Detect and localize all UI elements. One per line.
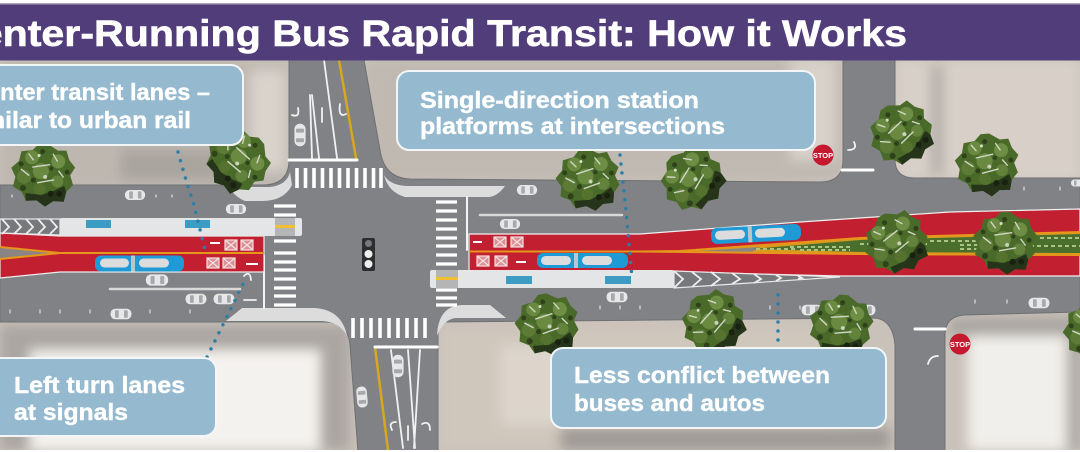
west station platform [0,218,302,236]
west bus [95,256,184,272]
north-west curb [229,172,292,201]
north-east curb [384,175,505,197]
callout: single-direction platforms: platforms at intersections [420,113,725,139]
red bus lanes west [0,233,264,278]
callout: left turn lanes: Left turn lanes [14,372,185,398]
stop sign north [812,144,834,166]
callout: less conflict: buses and autos [574,390,765,416]
east station platform [430,270,840,288]
stop sign south: STOP [950,340,970,349]
callout: single-direction platforms: Single-direction station [420,87,699,113]
crosswalks and curbs [226,168,506,338]
title banner [0,3,1080,60]
stop sign south [950,334,970,354]
south crosswalk [353,318,425,338]
median with planting [680,232,1080,256]
leader line: center lanes [178,152,205,250]
callout: center transit lanes [0,65,243,145]
south-east curb [437,305,506,336]
lane markings east [473,237,526,266]
east bus [537,253,628,268]
callout: left turn lanes: at signals [14,399,128,425]
street trees [2,96,1080,367]
north crosswalk [297,168,381,188]
lane markings west [207,240,258,268]
leader line: platforms [620,155,632,278]
west crosswalk [274,206,296,305]
leader line: left turn [207,280,245,357]
leader line: conflict [776,295,780,345]
callout: single-direction platforms [397,71,815,150]
cars [110,124,1080,408]
callout: less conflict: Less conflict between [574,362,830,388]
upper east bus [711,224,801,244]
callout: left turn lanes [0,358,216,436]
red bus lanes east [469,209,1080,276]
callout: less conflict [551,348,886,428]
south-west curb [226,308,347,336]
traffic signal [362,238,375,271]
stop sign north: STOP [813,151,833,160]
east crosswalk [436,202,457,305]
